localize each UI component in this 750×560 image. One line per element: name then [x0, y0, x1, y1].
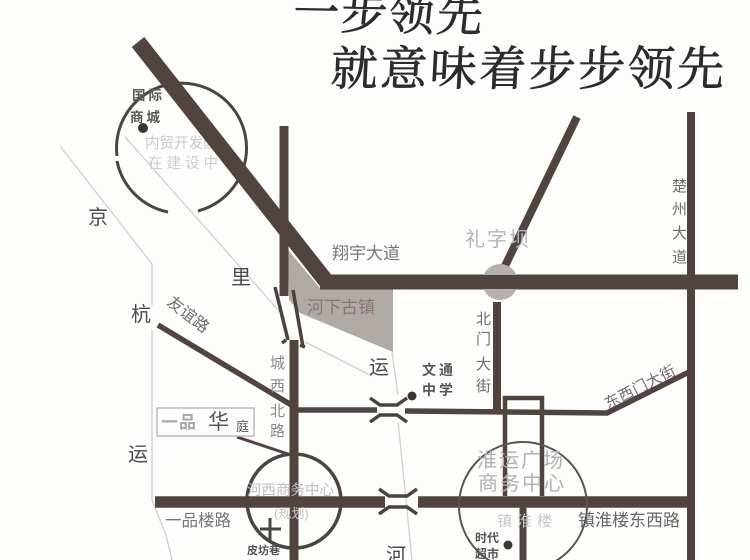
circle: international trade city: 内贸开发区	[145, 135, 218, 152]
canal labels: 运	[128, 444, 148, 466]
circle: Suqian Square business center: 时代	[475, 531, 499, 545]
canal labels: 京	[88, 206, 108, 229]
road labels: 大	[476, 356, 491, 373]
shaded area: old town	[288, 250, 393, 352]
label: Yipin Huating brand box	[157, 408, 254, 436]
road labels: 一品楼路	[165, 511, 232, 530]
label: Yipin Huating brand box: 一品	[161, 413, 197, 432]
road: lower branch	[520, 505, 526, 560]
canal: Beijing-Hangzhou grand canal outline	[60, 137, 412, 560]
canal labels: 运	[369, 357, 389, 379]
circle: Suqian Square business center: 淮运广场	[477, 449, 565, 472]
circle: Suqian Square business center: 商务中心	[478, 472, 566, 495]
title: 就意味着步步领先	[329, 44, 728, 96]
title	[291, 0, 728, 96]
road labels: 北	[476, 311, 491, 328]
canal labels	[88, 206, 406, 560]
circle: west business center: (规划)	[274, 506, 309, 521]
road labels: 道	[672, 249, 687, 266]
road: northeast branch	[504, 117, 577, 268]
road labels: 门	[476, 331, 491, 348]
road: East-West Gate Street	[294, 371, 691, 413]
road: North Gate Street	[493, 302, 501, 412]
school: Wentong Middle School	[408, 362, 456, 400]
bridge: south	[379, 489, 417, 514]
label: Yipin Huating brand box: 庭	[236, 419, 249, 434]
circle: international trade city: 国际	[132, 88, 165, 103]
school: Wentong Middle School: 文通	[422, 362, 456, 378]
road: pointer to Yipin Huating	[237, 437, 288, 454]
junction circle: Lizi	[465, 228, 531, 300]
circle: international trade city: 商城	[130, 109, 163, 125]
circle: international trade city	[117, 83, 247, 212]
road: east vertical (Chuzhou Avenue)	[687, 112, 695, 560]
road: Xiangyu Avenue	[320, 274, 738, 290]
circle: Suqian Square business center: 镇淮楼	[497, 513, 557, 530]
circle: international trade city: 在建设中	[148, 155, 222, 172]
road labels: 街	[476, 378, 491, 395]
road labels: 友谊路	[164, 293, 212, 337]
road labels: 西	[270, 378, 285, 395]
road labels: 州	[672, 201, 687, 218]
label: Yipin Huating brand box: 华	[208, 411, 229, 434]
bridge: middle	[370, 398, 407, 422]
road labels: 城	[270, 355, 285, 372]
roads	[138, 42, 738, 560]
road: Youyi Road	[158, 325, 293, 406]
road labels: 翔宇大道	[332, 244, 400, 263]
road labels: 镇淮楼东西路	[578, 511, 680, 530]
road: diagonal main road	[138, 42, 326, 281]
school: Wentong Middle School: 中学	[422, 382, 456, 398]
road: rectangle around square	[505, 398, 542, 496]
bridge symbols	[275, 287, 417, 514]
road labels: 路	[270, 423, 285, 440]
shaded area: old town: 河下古镇	[307, 298, 375, 317]
road labels: 大	[672, 225, 687, 242]
road labels	[164, 178, 687, 530]
canal labels: 里	[231, 267, 251, 289]
junction circle: Lizi: 礼字坝	[465, 228, 531, 251]
road labels: 东西门大街	[602, 362, 679, 413]
circle: west business center	[247, 454, 341, 557]
road labels: 北	[270, 403, 285, 420]
canal labels: 杭	[131, 303, 151, 326]
circle: Suqian Square business center	[459, 442, 587, 560]
bridge: north	[275, 287, 305, 347]
road: west vertical upper	[280, 126, 288, 296]
road: Zhenhuai Tower Road	[155, 496, 690, 508]
road: Chengxi North Road lower	[290, 340, 298, 560]
circle: west business center: 皮坊巷	[247, 543, 280, 557]
circle: west business center: 河西商务中心	[247, 482, 334, 499]
road labels: 楚	[672, 178, 687, 195]
